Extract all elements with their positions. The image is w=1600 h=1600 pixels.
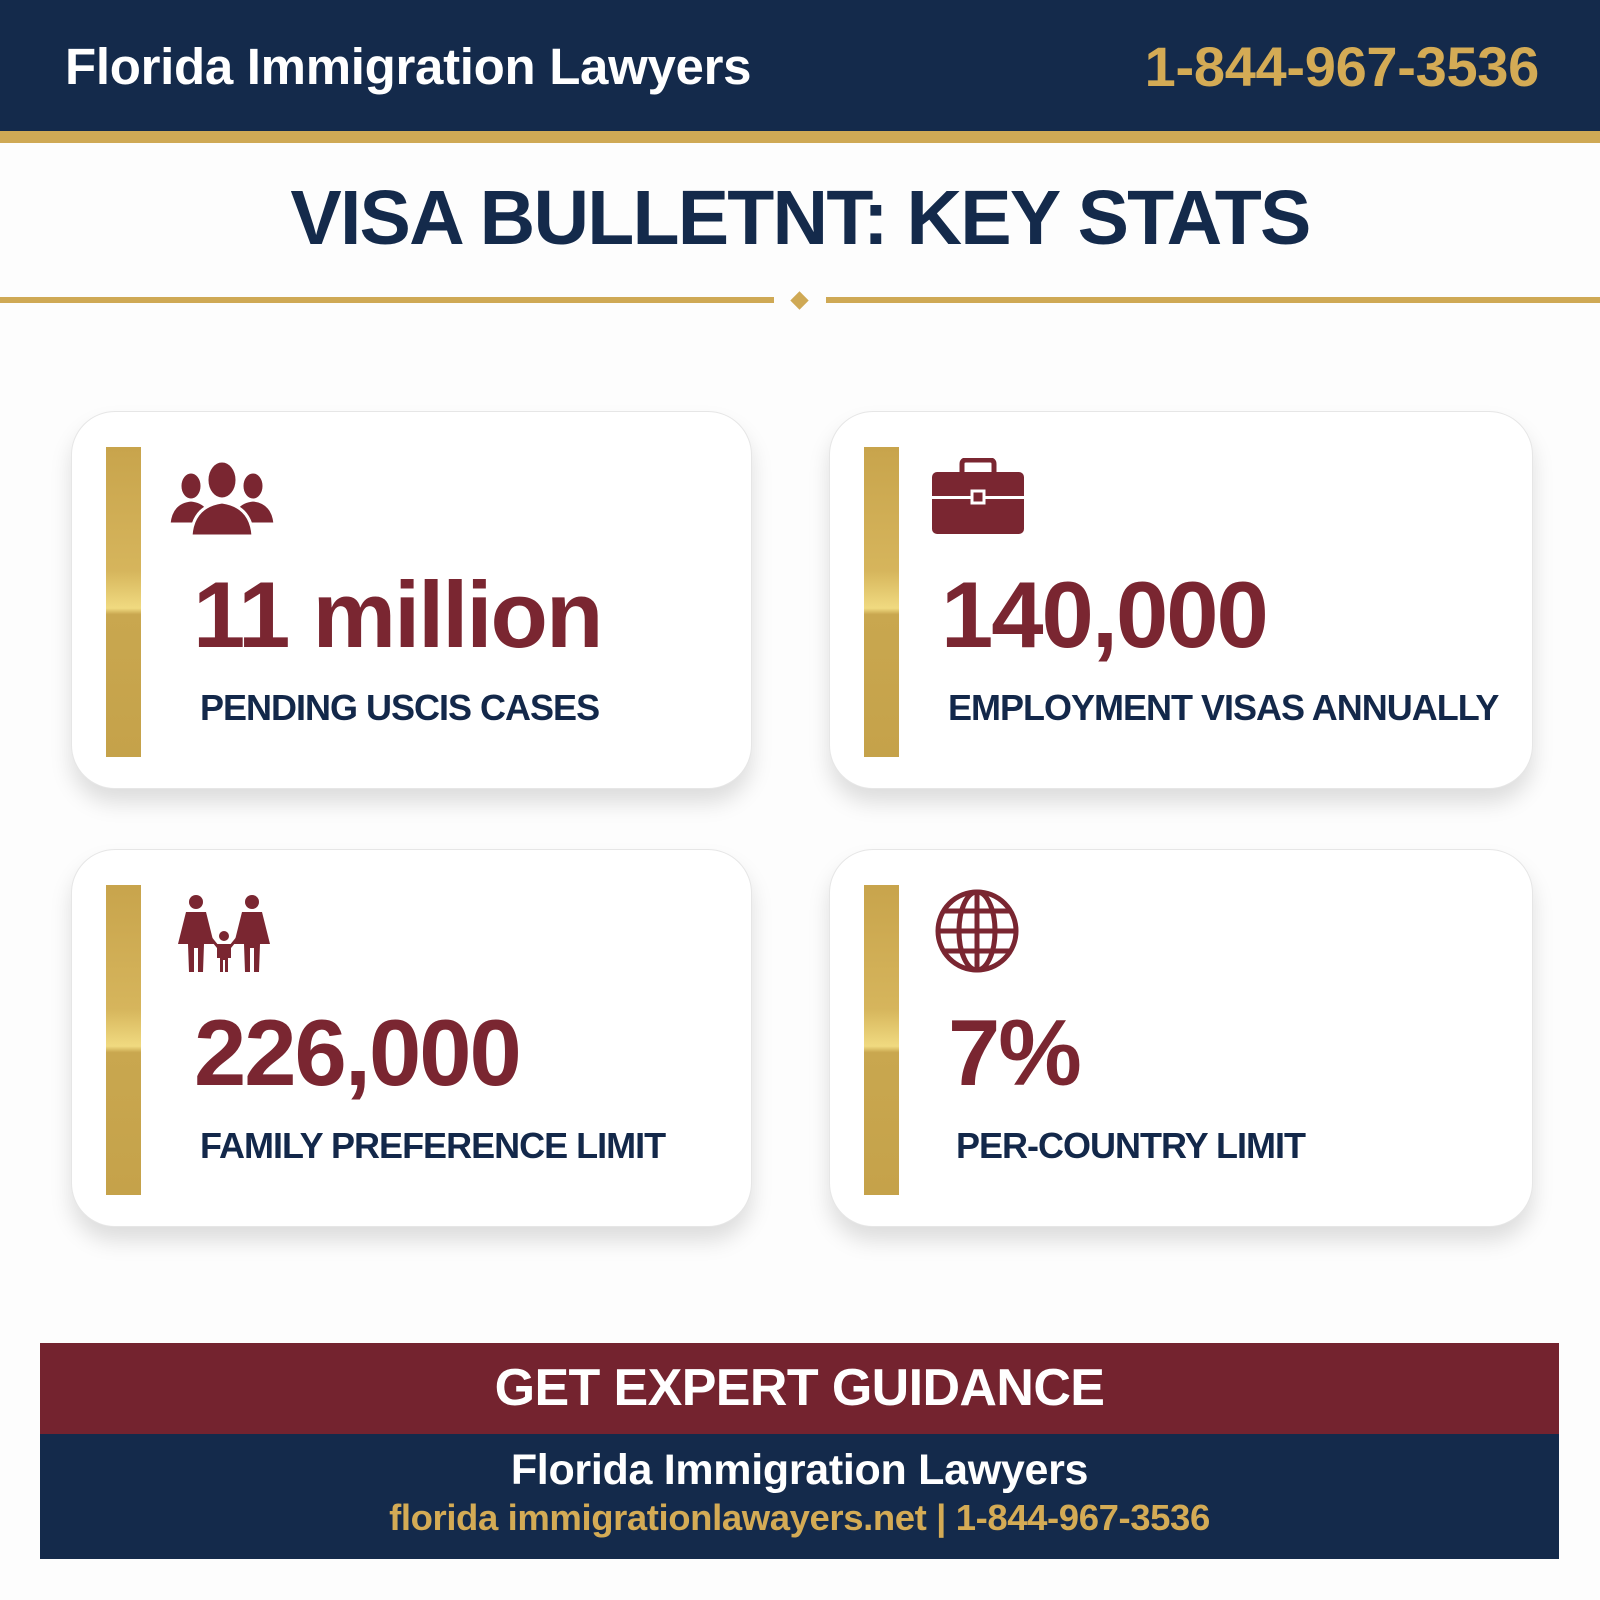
card: per-country limit xyxy=(829,849,1533,1227)
header firm name: Florida Immigration Lawyers xyxy=(65,38,751,95)
contact block xyxy=(40,1434,1559,1559)
stat number: 140,000 xyxy=(941,562,1267,667)
stat number: 7% xyxy=(948,1000,1080,1105)
divider with diamond xyxy=(0,291,1600,310)
stat label: PER-COUNTRY LIMIT xyxy=(956,1125,1305,1166)
stat number: 11 million xyxy=(193,562,601,667)
contact block: Florida Immigration Lawyers xyxy=(511,1446,1088,1494)
card: pending cases xyxy=(71,411,752,789)
stat number: 226,000 xyxy=(194,1000,520,1105)
stat label: PENDING USCIS CASES xyxy=(200,687,599,728)
stat label: FAMILY PREFERENCE LIMIT xyxy=(200,1125,665,1166)
header bar xyxy=(0,0,1600,131)
contact block: florida immigrationlawayers.net | 1-844-967-3536 xyxy=(389,1497,1210,1538)
CTA heading: GET EXPERT GUIDANCE xyxy=(495,1359,1104,1417)
icon: briefcase xyxy=(932,458,1024,534)
stat label: EMPLOYMENT VISAS ANNUALLY xyxy=(948,687,1498,728)
title: VISA BULLETNT: KEY STATS xyxy=(290,175,1310,261)
card: family preference xyxy=(71,849,752,1227)
CTA heading xyxy=(40,1343,1559,1434)
icon: globe xyxy=(936,890,1018,972)
card: employment visas xyxy=(829,411,1533,789)
icon: family xyxy=(178,895,270,972)
icon: people xyxy=(170,462,274,534)
header phone: 1-844-967-3536 xyxy=(1145,35,1539,98)
footer CTA banner xyxy=(40,1343,1559,1559)
